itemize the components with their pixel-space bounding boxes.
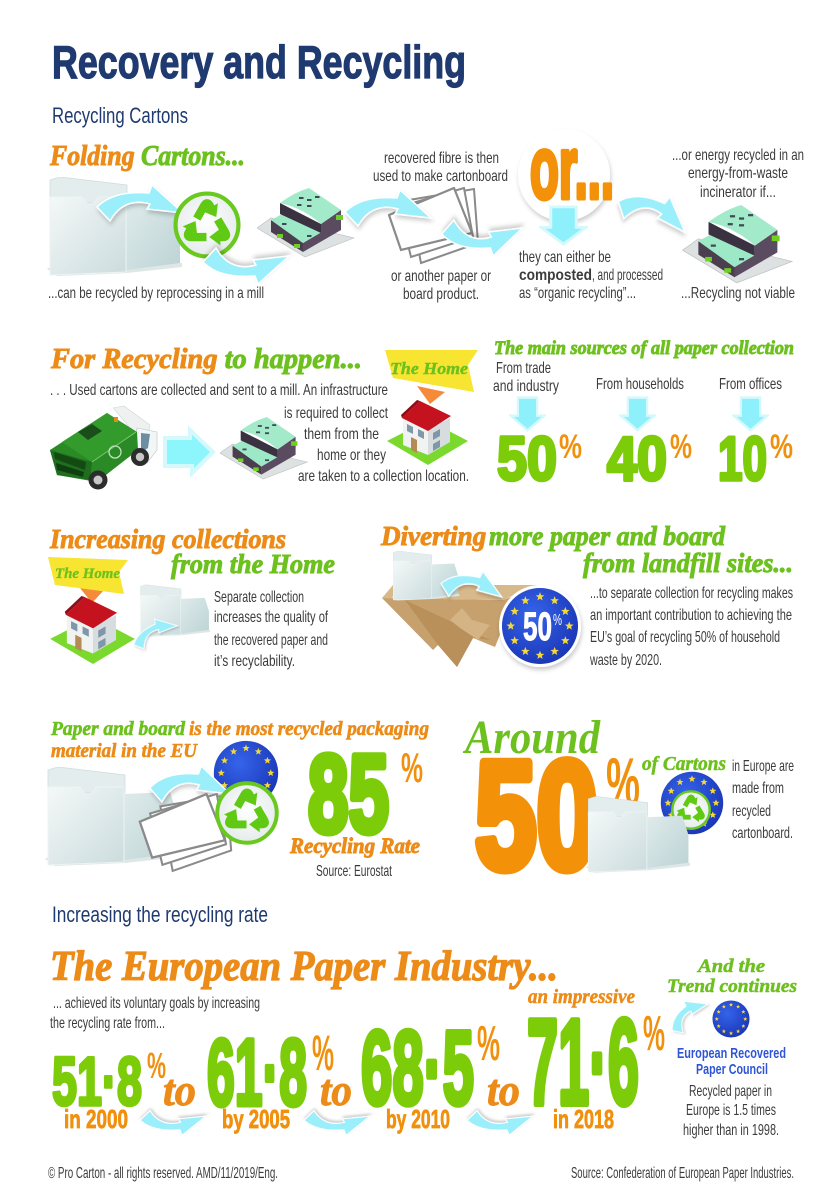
- arrow: house to cartons: [128, 611, 180, 652]
- arrow: paper to compost: [442, 220, 522, 256]
- banner: the home: [385, 350, 478, 404]
- stat: 2010: %: [477, 1017, 500, 1071]
- stat: offices: From offices: [719, 376, 782, 393]
- icon: eu 50 percent badge: [499, 585, 581, 667]
- arrow: cartons to eu goal: [439, 566, 505, 604]
- text: composted: they can either be: [519, 249, 611, 266]
- arrow: trend up: [663, 991, 711, 1037]
- icon: recycling badge: [176, 194, 238, 256]
- stat: 2005: 61·8: [207, 1020, 307, 1126]
- stat: trade and industry: From trade: [496, 360, 551, 377]
- title: Recovery and Recycling: [52, 36, 466, 88]
- caption: recycling not viable: ...Recycling not viable: [681, 285, 795, 302]
- text: eu goal: waste by 2020.: [589, 652, 662, 669]
- icon: recycling badge: [672, 791, 710, 829]
- text: infrastructure description: . . . Used cartons are collected and sent to a mill. An infrastructure: [50, 382, 388, 399]
- icon: mill: [220, 417, 307, 479]
- icon: incinerator: [683, 205, 792, 283]
- banner: the home: The Home: [55, 566, 120, 582]
- heading: diverting more paper: more paper and board: [489, 521, 725, 551]
- stat: 2018: in 2018: [553, 1104, 614, 1134]
- arrow: 2000 to 2005: [140, 1111, 206, 1135]
- arrow: 2005 to 2010: [304, 1111, 370, 1135]
- stat: 2000: in 2000: [64, 1104, 128, 1134]
- arrow: cartons to recycling: [150, 766, 230, 802]
- text: recycled paper in europe: Europe is 1.5 times: [686, 1102, 776, 1119]
- stat: 2010: [361, 1010, 500, 1134]
- text: recycled paper in europe: higher than in 1998.: [683, 1122, 779, 1139]
- arrow: or to incinerator: [614, 181, 695, 240]
- label: recycling rate: Recycling Rate: [289, 833, 420, 858]
- icon: eu flag: [712, 1000, 750, 1038]
- callout: or bubble: [518, 118, 614, 221]
- text: infrastructure description: is required to collect: [284, 405, 388, 422]
- text: recycled paper in europe: Recycled paper in: [689, 1083, 772, 1100]
- text: made from recycled cartonboard: cartonboard.: [732, 825, 793, 842]
- text: voluntary goals: ... achieved its voluntary goals by increasing: [53, 995, 260, 1012]
- heading: main sources: The main sources of all paper collection: [494, 338, 794, 359]
- text: another paper product: board product.: [403, 286, 479, 303]
- callout: or bubble: or...: [530, 118, 614, 217]
- stat: households: [596, 376, 692, 494]
- text: infrastructure description: home or they: [317, 447, 386, 464]
- icon: eu badge: [661, 772, 723, 834]
- icon: eu 50 percent badge: 50: [523, 605, 552, 649]
- text: energy recycled: energy-from-waste: [688, 165, 788, 182]
- arrow: 2010 to 2018: [467, 1111, 533, 1135]
- banner: the home: [48, 557, 128, 603]
- heading: diverting more paper: Diverting: [380, 521, 493, 551]
- label: european recovered paper council: Paper Council: [696, 1061, 768, 1078]
- icon: recycling truck: [50, 406, 157, 490]
- stat: households: From households: [596, 376, 684, 393]
- panel: main sources of paper collection: [493, 338, 794, 494]
- connector: to: to: [487, 1066, 520, 1115]
- icon: eu flag circle: [214, 741, 278, 805]
- stat: 2000: 51·8: [52, 1043, 142, 1120]
- text: composted: , and processed: [592, 267, 663, 284]
- text: voluntary goals: the recycling rate from...: [50, 1015, 165, 1032]
- heading: folding cartons: Folding Cartons...: [49, 141, 245, 172]
- panel: increasing collections: [48, 524, 335, 670]
- illustration: landfill: [382, 585, 537, 667]
- stat: trade and industry: 50: [497, 425, 557, 494]
- connector: to: to: [163, 1066, 196, 1115]
- arrow: recycling to mill: [203, 248, 289, 284]
- stat: 2005: by 2005: [222, 1104, 290, 1134]
- text: separate collection: it’s recyclability.: [214, 653, 295, 670]
- arrow: mill to paper: [345, 190, 431, 226]
- heading: paper and board: material in the EU: [51, 740, 198, 762]
- heading: diverting more paper: from landfill sites...: [583, 548, 793, 578]
- panel: for recycling to happen: [50, 344, 478, 490]
- heading: increasing collections: Increasing collections: [49, 524, 286, 554]
- text: another paper product: or another paper or: [391, 268, 491, 285]
- caption: reprocessing in a mill: ...can be recycled by reprocessing in a mill: [48, 285, 264, 302]
- icon: paper stack: [140, 794, 231, 871]
- heading: of cartons: of Cartons: [642, 753, 726, 775]
- stat: offices: [718, 376, 793, 494]
- stat: 85 percent: 85: [308, 733, 389, 856]
- icon: eu 50 percent badge: %: [553, 612, 562, 629]
- icon: recycling badge: [217, 783, 277, 843]
- text: infrastructure description: are taken to a collection location.: [298, 468, 469, 485]
- footer: copyright: © Pro Carton - all rights reserved. AMD/11/2019/Eng.: [48, 1165, 278, 1182]
- text: made from recycled cartonboard: made from: [732, 780, 784, 797]
- heading: paper and board: Paper and board: [50, 718, 186, 740]
- icon: mill: [257, 188, 354, 257]
- icon: cartons: [45, 767, 180, 866]
- text: made from recycled cartonboard: in Europe are: [732, 758, 794, 775]
- panel: european paper industry: [50, 944, 797, 1139]
- heading: paper and board: is the most recycled packaging: [189, 718, 429, 740]
- stat: trade and industry: %: [559, 428, 582, 466]
- stat: trade and industry: and industry: [493, 378, 559, 395]
- text: energy recycled: incinerator if...: [700, 184, 776, 201]
- connector: to: to: [320, 1066, 352, 1115]
- stat: trade and industry: [493, 360, 582, 494]
- arrow: carton to recycling: [97, 185, 183, 221]
- text: made from recycled cartonboard: recycled: [732, 803, 771, 820]
- label: european recovered paper council: European Recovered: [677, 1045, 786, 1062]
- heading: and the trend continues: And the: [697, 956, 766, 977]
- panel: diverting from landfill: [380, 521, 793, 669]
- source: eurostat: Source: Eurostat: [316, 863, 392, 880]
- stat: offices: 10: [718, 425, 767, 494]
- icon: house: [50, 596, 135, 664]
- subheading: increasing the recycling rate: Increasing the recycling rate: [52, 902, 268, 927]
- heading: increasing collections: from the Home: [171, 549, 335, 579]
- heading: around: Around: [462, 711, 601, 764]
- panel: most recycled packaging material: [45, 718, 429, 880]
- subheading: recycling cartons: Recycling Cartons: [52, 103, 188, 128]
- stat: 50 percent: 50: [475, 730, 598, 901]
- arrow: down to compost: [541, 207, 586, 244]
- text: recovered fibre: used to make cartonboard: [373, 168, 508, 185]
- stat: 2018: [527, 994, 665, 1134]
- icon: cartons: [586, 796, 690, 873]
- icon: cartons: [139, 585, 210, 637]
- icon: house: [387, 400, 468, 465]
- stat: 2000: %: [147, 1045, 166, 1086]
- stat: 2005: [207, 1020, 334, 1134]
- text: separate collection: the recovered paper and: [214, 632, 328, 649]
- text: composted: composted: [519, 267, 592, 284]
- stat: offices: %: [770, 428, 793, 466]
- text: composted: as “organic recycling”...: [519, 285, 636, 302]
- icon: paper stack: [389, 188, 478, 263]
- text: infrastructure description: them from the: [304, 426, 379, 443]
- heading: for recycling to happen: For Recycling to happen...: [50, 344, 362, 375]
- stat: 2010: by 2010: [386, 1104, 450, 1134]
- stat: 85 percent: %: [401, 744, 423, 791]
- stat: households: %: [670, 428, 692, 466]
- arrow: truck to mill: [165, 430, 213, 473]
- stat: 50 percent: %: [606, 744, 640, 820]
- icon: cartons: [392, 551, 459, 600]
- stat: 2018: 71·6: [527, 994, 639, 1130]
- stat: 2010: 68·5: [361, 1010, 474, 1127]
- panel: european paper industry: %: [312, 1025, 334, 1081]
- panel: around 50 percent of cartons: [462, 711, 794, 901]
- heading: and the trend continues: Trend continues: [667, 976, 797, 997]
- stat: households: 40: [607, 425, 667, 494]
- text: recovered fibre: recovered fibre is then: [384, 150, 499, 167]
- stat: 2018: %: [643, 1007, 665, 1061]
- text: separate collection: increases the quality of: [214, 609, 328, 626]
- label: an impressive: an impressive: [528, 986, 635, 1008]
- text: separate collection: Separate collection: [214, 589, 304, 606]
- banner: the home: The Home: [390, 359, 468, 378]
- heading: the european paper industry: The European Paper Industry...: [50, 944, 558, 990]
- panel: folding cartons flow: [47, 118, 804, 303]
- icon: cartons: [47, 177, 182, 276]
